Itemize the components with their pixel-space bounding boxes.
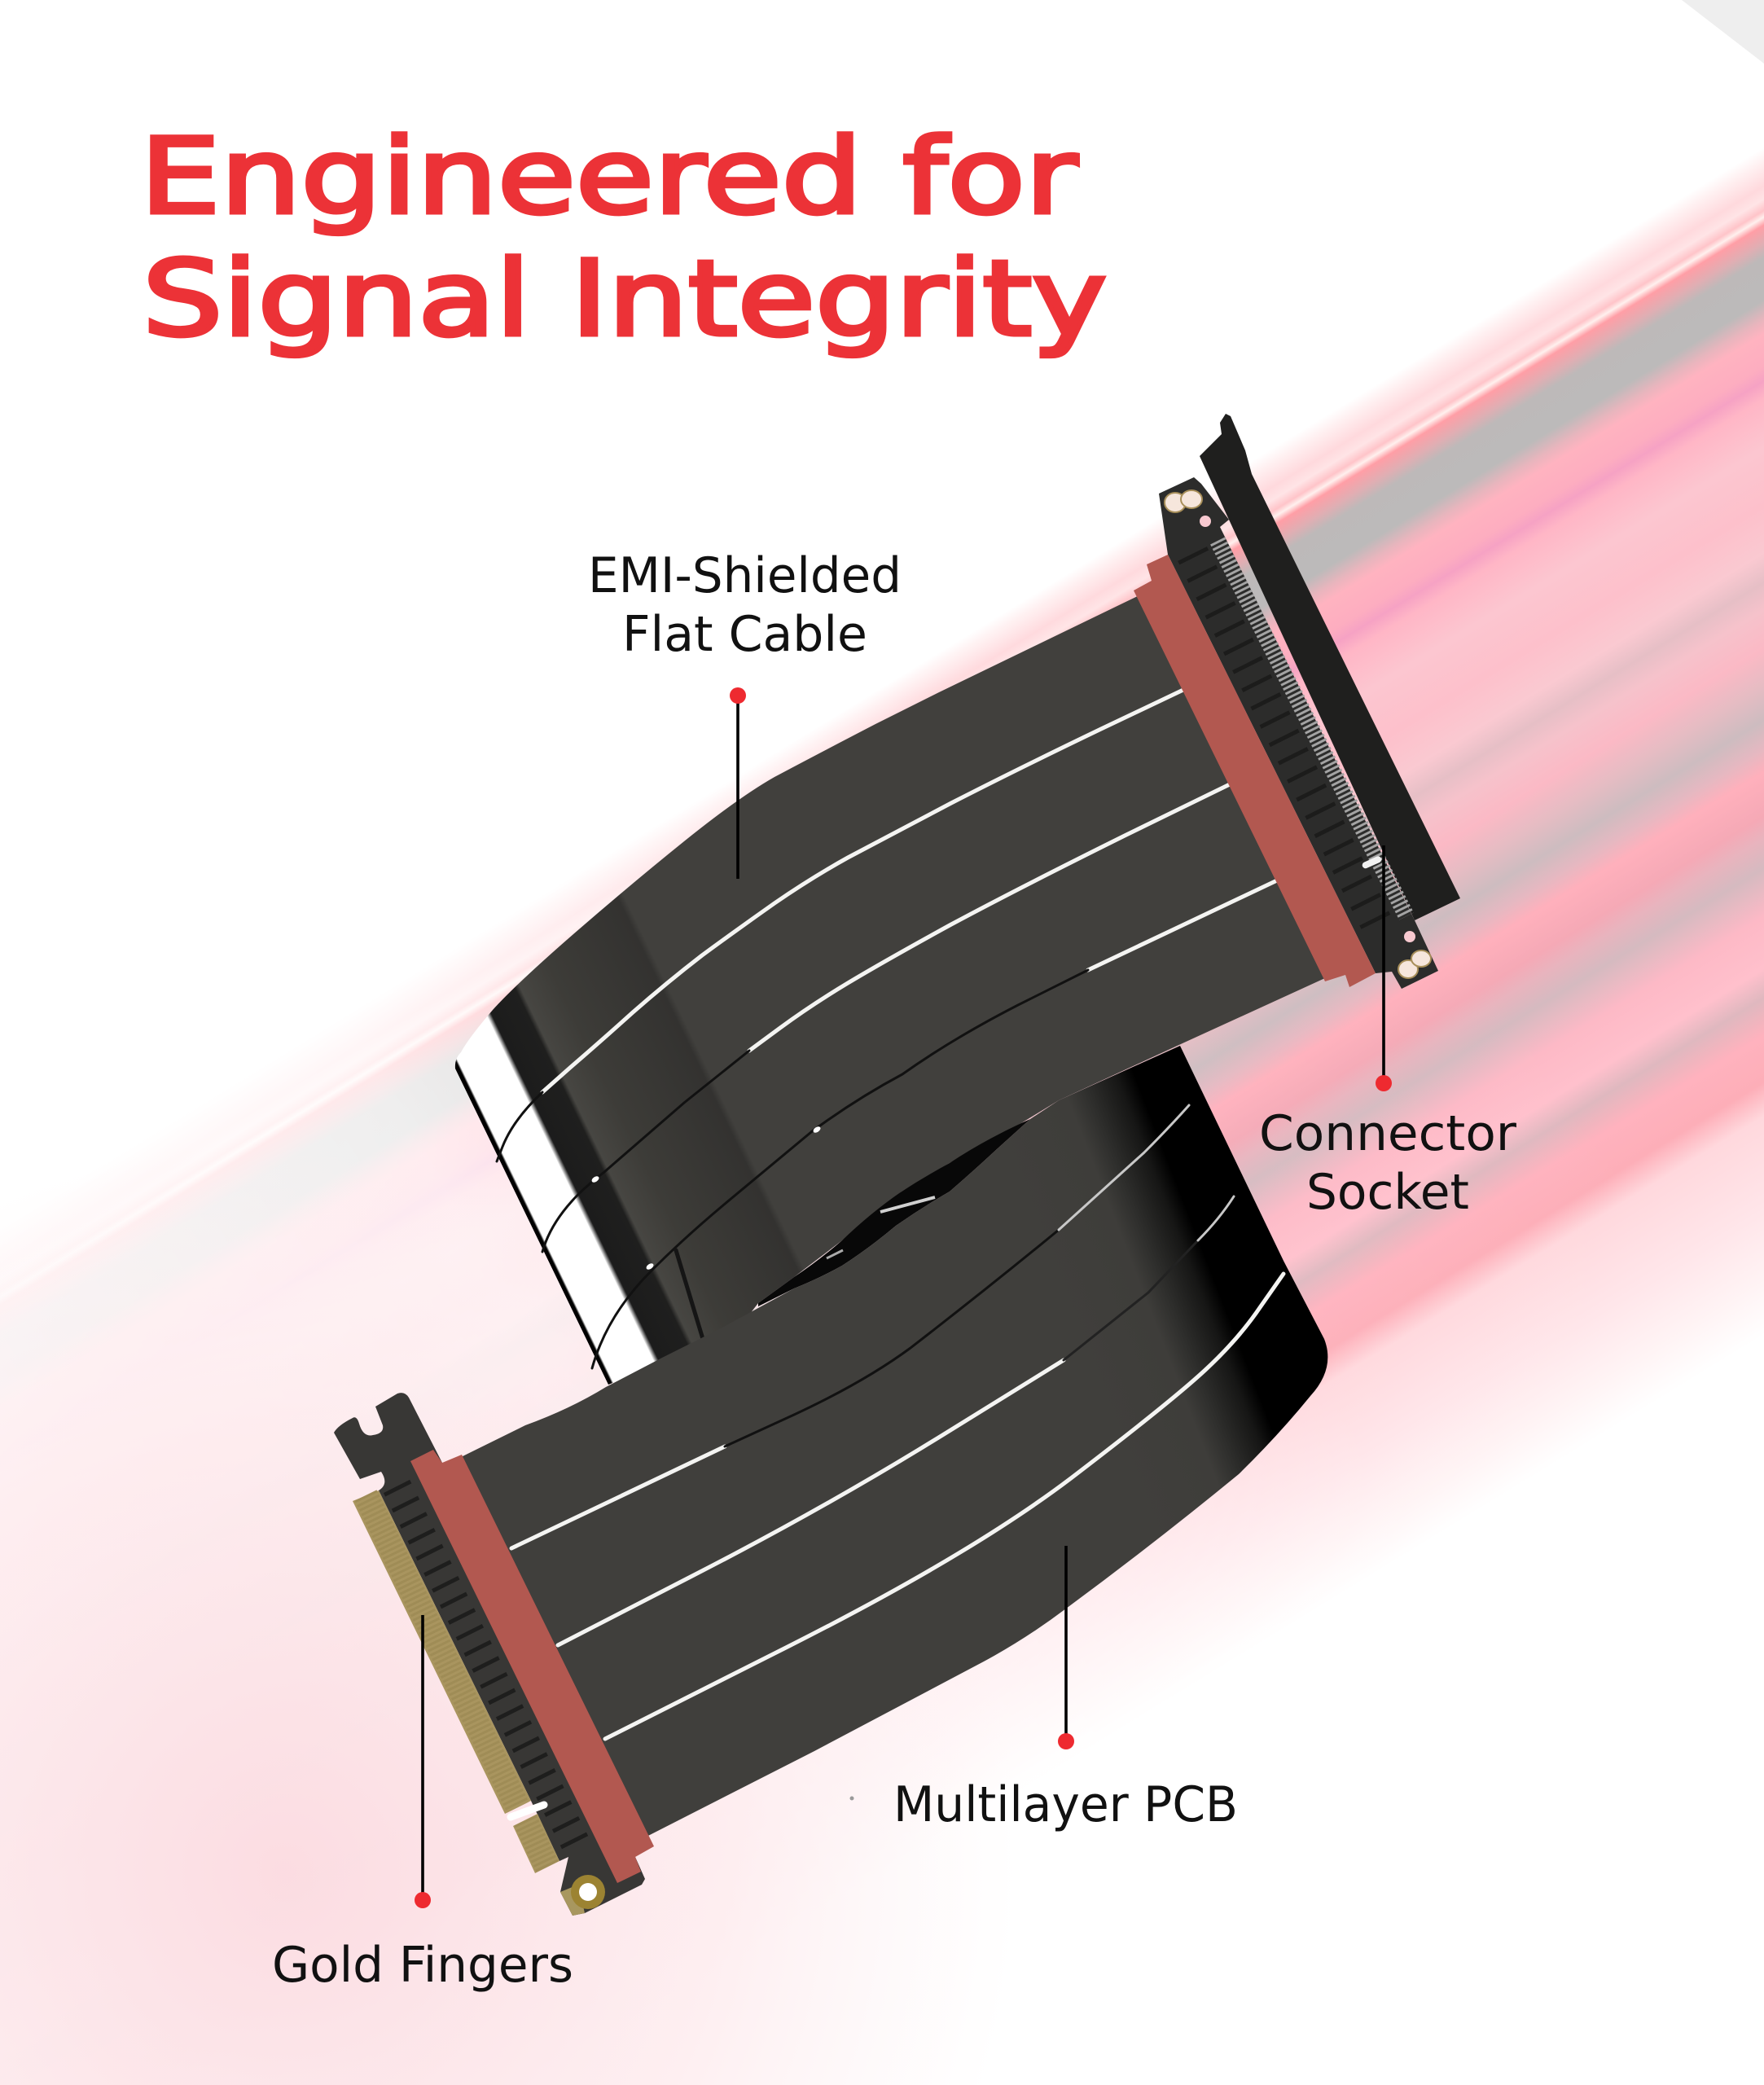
callout: Gold Fingers	[272, 1615, 573, 1994]
trace pattern	[1192, 554, 1380, 929]
black socket housing	[1200, 414, 1460, 920]
riser cable product illustration	[334, 414, 1460, 1916]
mounting holes	[1165, 490, 1431, 978]
socket notch	[1361, 855, 1383, 870]
signal lines on upper ribbon	[497, 689, 1277, 1385]
upper ribbon with glossy left fold	[455, 593, 1336, 1385]
card notch	[511, 1805, 544, 1817]
callout: EMI-Shielded Flat Cable	[588, 547, 902, 879]
title	[140, 116, 1107, 360]
slit between ribbons	[758, 1119, 1030, 1306]
socket pins	[1218, 541, 1406, 916]
callout: Connector Socket	[1259, 845, 1516, 1221]
socket PCB	[1159, 477, 1438, 989]
callout: Gold Fingers: Gold Fingers	[272, 1937, 573, 1994]
callout: Connector Socket: Socket	[1306, 1164, 1469, 1221]
speck	[850, 1797, 853, 1800]
bracket and PCB	[334, 1393, 645, 1916]
callout: EMI-Shielded Flat Cable: Flat Cable	[622, 606, 867, 663]
PCB trace pattern	[397, 1486, 578, 1849]
gold finger edge connector end	[334, 1393, 654, 1916]
gold fingers	[353, 1490, 531, 1814]
title: Signal Integrity	[143, 239, 1107, 360]
title: Engineered for	[140, 116, 1077, 238]
connector socket end	[1134, 414, 1460, 989]
callout: Connector Socket: Connector	[1259, 1105, 1516, 1162]
corner: grey page fold	[1682, 0, 1764, 64]
callout: Multilayer PCB: Multilayer PCB	[893, 1776, 1238, 1833]
red strain relief	[1134, 555, 1376, 987]
line glints	[590, 1126, 822, 1271]
lower ribbon with glossy right fold	[456, 1046, 1327, 1838]
callout: EMI-Shielded Flat Cable: EMI-Shielded	[588, 547, 902, 604]
callout: Multilayer PCB	[893, 1546, 1238, 1833]
red strain relief	[410, 1450, 654, 1883]
signal lines on lower ribbon	[511, 1105, 1284, 1739]
mounting hole	[560, 1875, 605, 1916]
